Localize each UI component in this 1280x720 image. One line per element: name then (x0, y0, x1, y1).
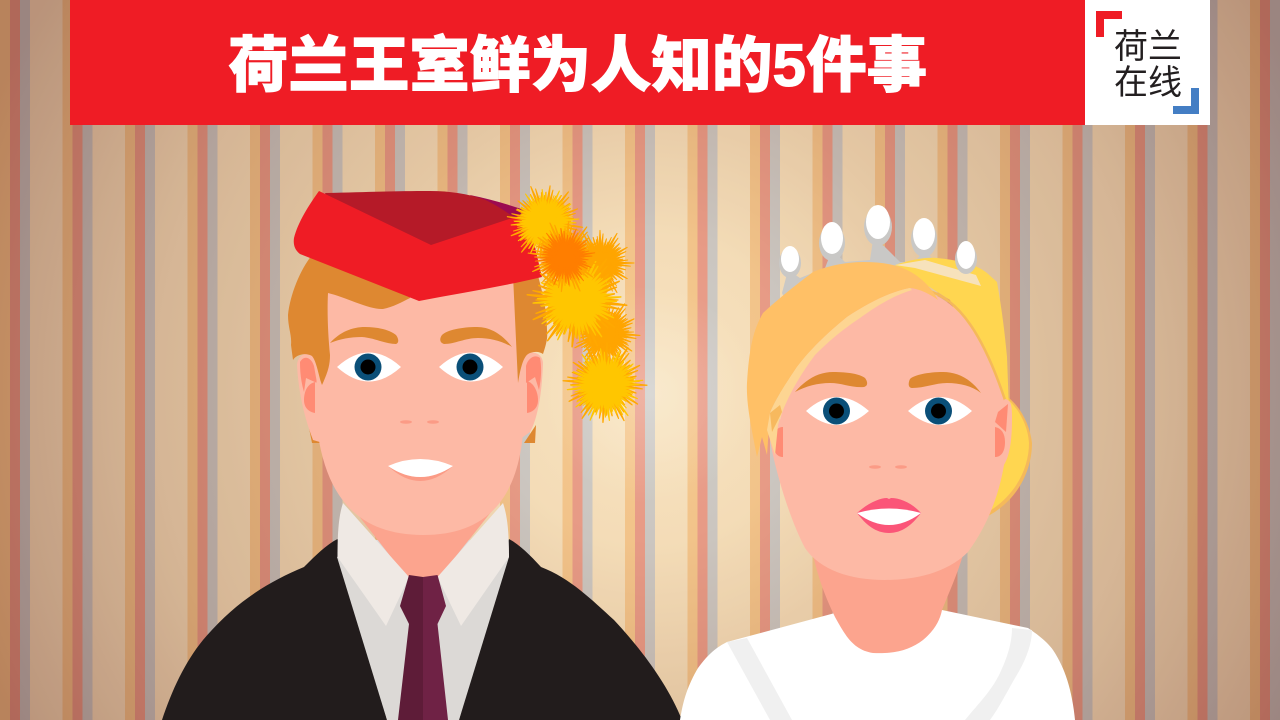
shirt (337, 540, 509, 720)
blouse trim right (965, 628, 1032, 720)
hair light strand (767, 288, 912, 455)
figure: princess with tiara (680, 205, 1075, 720)
eyebrows (330, 327, 512, 347)
neck (813, 555, 963, 653)
eyebrows (795, 372, 981, 393)
face (770, 288, 1006, 580)
hair left (288, 255, 420, 385)
hair bun (988, 395, 1032, 516)
face (315, 270, 524, 535)
ear left (297, 353, 330, 445)
mouth (388, 459, 453, 481)
logo text: 荷兰 (1114, 19, 1182, 68)
cap crown (325, 191, 515, 252)
tiara right gem (955, 241, 977, 274)
nose (869, 465, 907, 469)
ear right (512, 353, 543, 445)
ears (773, 399, 1012, 470)
title banner: 荷兰王室鲜为人知的5件事 (228, 31, 927, 99)
logo red corner bracket (1096, 11, 1122, 37)
logo blue corner bracket (1173, 88, 1199, 114)
tiara (779, 205, 960, 310)
figure: prince in suit and red cap (162, 181, 682, 720)
hair right side (895, 258, 1009, 410)
blouse trim left (727, 638, 792, 720)
cap red band (294, 191, 542, 301)
logo text: 在线 (1114, 55, 1182, 104)
logo text (1114, 19, 1182, 104)
nose (400, 420, 439, 424)
blouse (680, 610, 1075, 720)
hair edge shadow (925, 290, 1005, 400)
back hair below ears (309, 425, 536, 443)
neck (344, 497, 503, 582)
eyes (337, 352, 503, 382)
logo block (1085, 0, 1210, 125)
hair highlight (895, 260, 981, 286)
hair left side (747, 262, 938, 457)
eyes (806, 397, 972, 425)
suit jacket (162, 539, 682, 720)
hair right (513, 272, 547, 383)
cap purple tip (470, 195, 530, 222)
collar (338, 503, 509, 626)
hair small patch (770, 405, 782, 432)
pompom feather plume (502, 181, 649, 425)
lips (857, 498, 921, 533)
title banner (70, 0, 1085, 125)
necktie (398, 575, 448, 720)
